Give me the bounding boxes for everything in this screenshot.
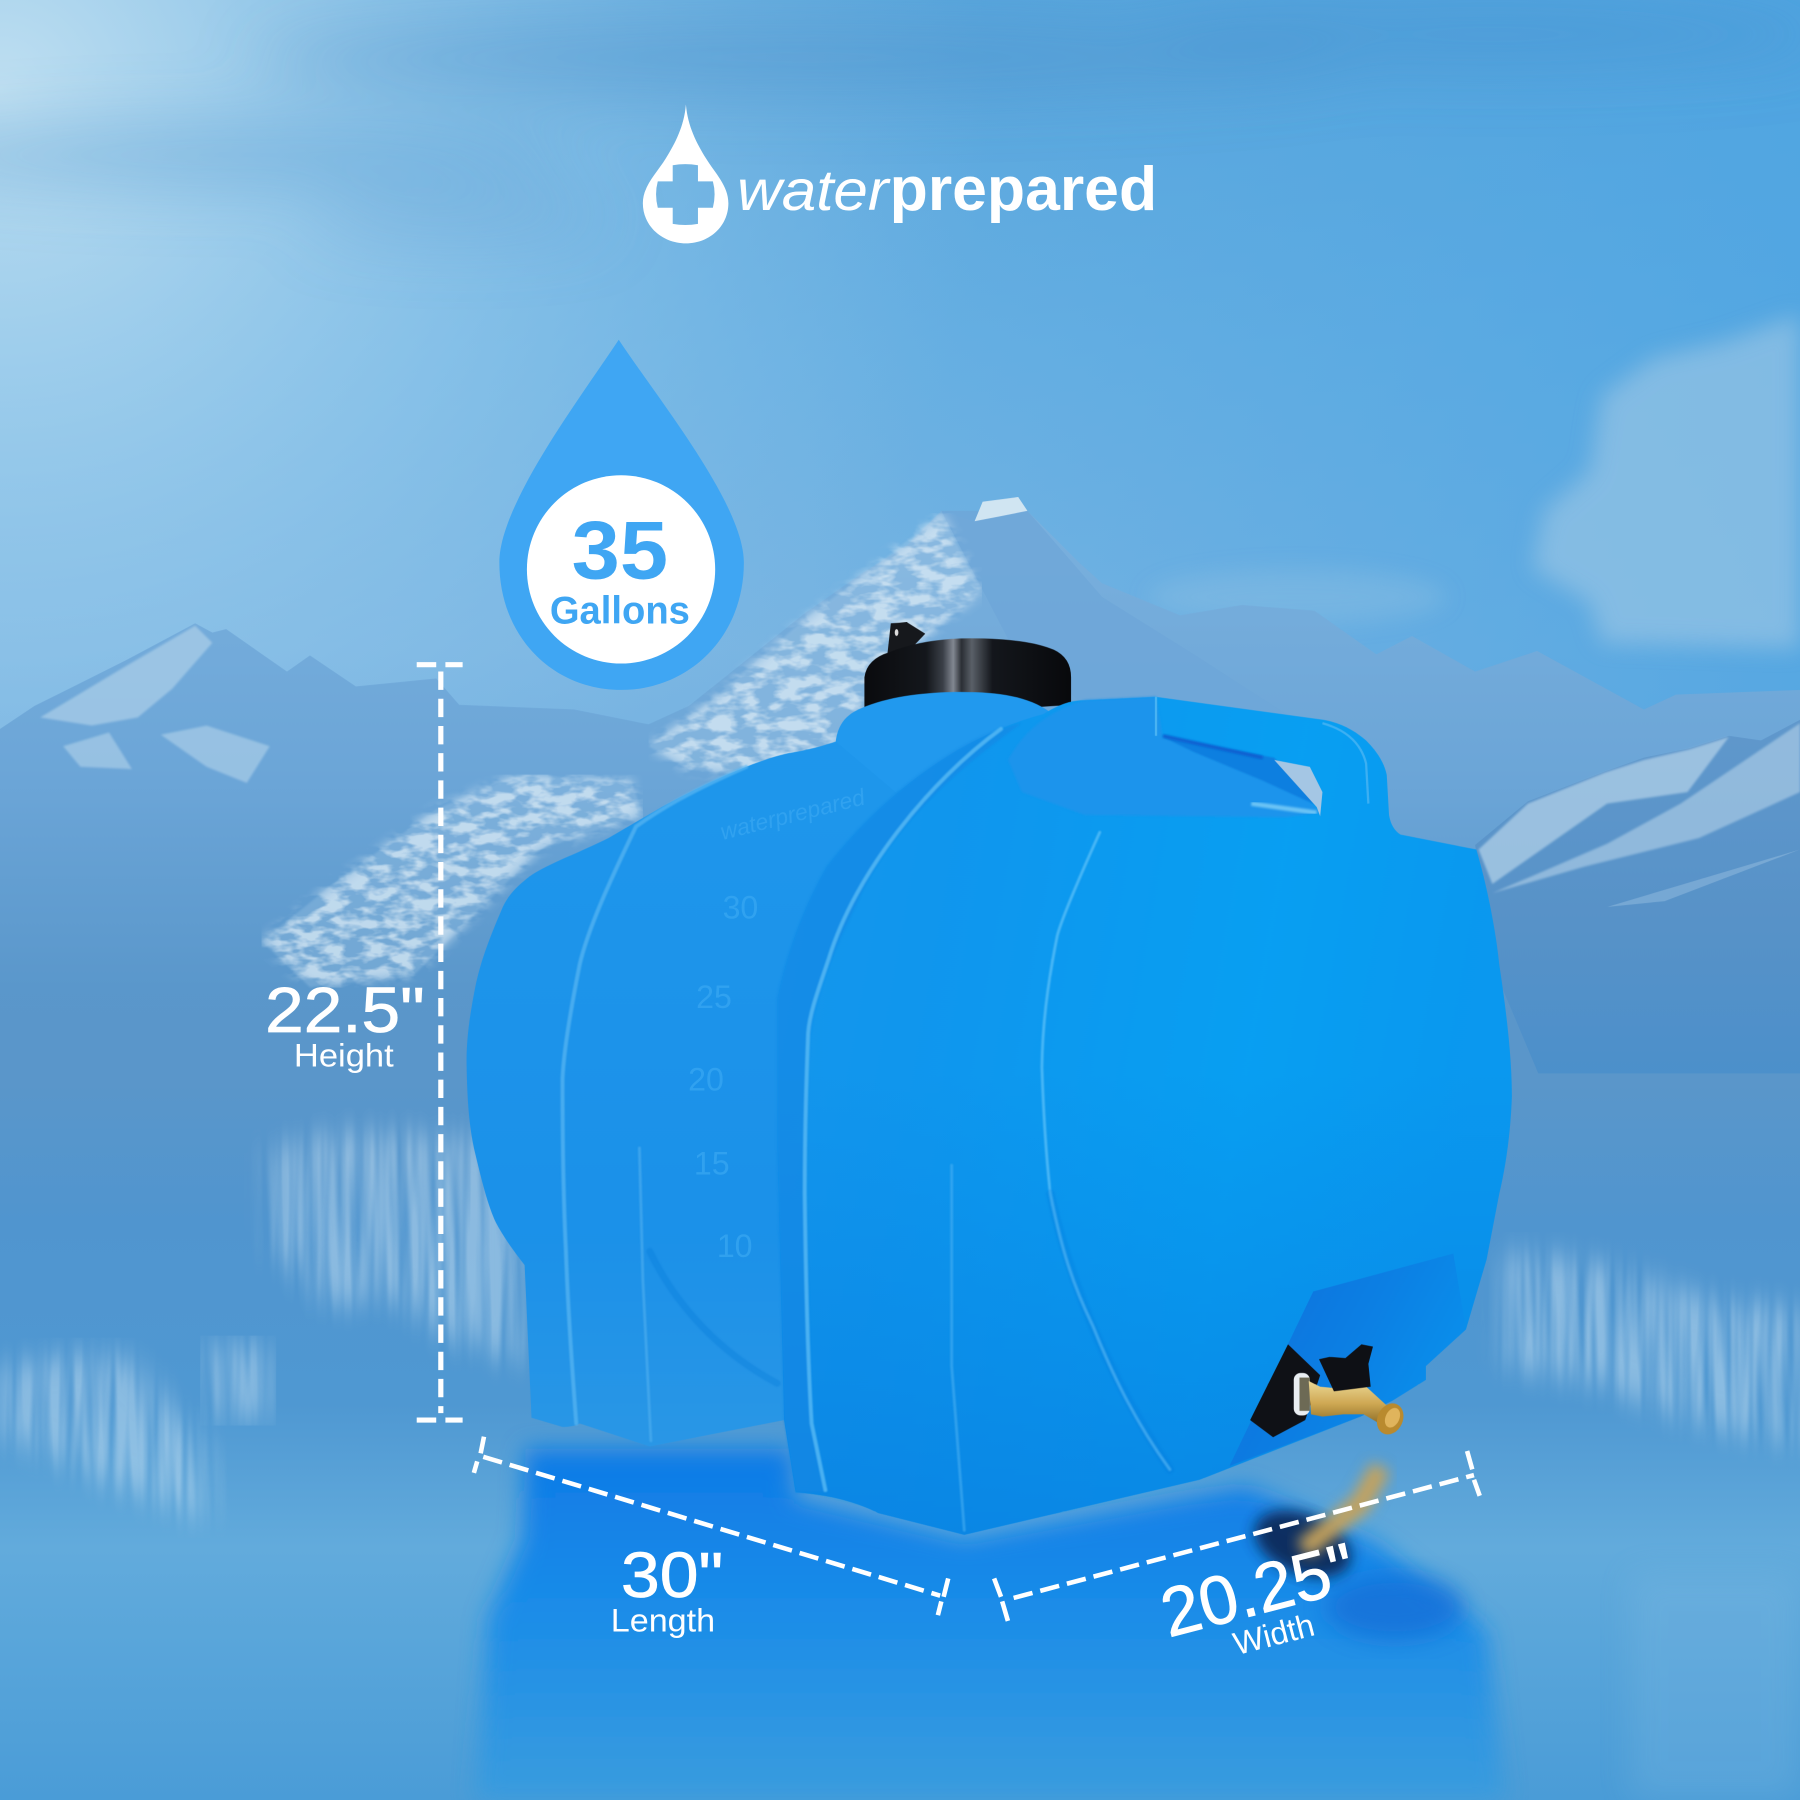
product: water tank [467, 622, 1512, 1535]
dimension: length [474, 1437, 948, 1638]
height measure line [417, 665, 463, 1420]
tank embossed markings: 20 [688, 1062, 724, 1098]
height label: Height [294, 1037, 394, 1073]
tank band shading [777, 723, 1022, 1492]
capacity unit: Gallons [550, 589, 690, 632]
logo wordmark: prepared [890, 155, 1157, 224]
height value: 22.5" [265, 974, 425, 1046]
background: high clouds [0, 5, 1800, 236]
tank reflection on water [476, 1449, 1504, 1800]
tank embossed markings [688, 783, 869, 1264]
tank embossed markings: 30 [723, 889, 758, 925]
capacity badge: 35 gallons [499, 340, 744, 690]
background: snow on mountains [40, 497, 1027, 987]
logo wordmark: water [737, 159, 892, 223]
background: right cloud [1148, 315, 1800, 649]
background: near right mountains [1475, 720, 1800, 1073]
tank cap [864, 622, 1071, 712]
dimension: width [994, 1451, 1480, 1662]
capacity number: 35 [572, 504, 668, 597]
width value: 20.25" [1153, 1528, 1363, 1652]
tank embossed markings: waterprepared [718, 783, 869, 845]
tank front section [777, 697, 1512, 1535]
tank embossed markings: 15 [694, 1145, 730, 1181]
width measure line [994, 1451, 1480, 1621]
length value: 30" [621, 1539, 723, 1611]
tank neck [836, 692, 1056, 792]
length label: Length [611, 1602, 715, 1638]
logo: waterprepared [643, 104, 1157, 243]
dimension: height [265, 665, 463, 1420]
width label: Width [1230, 1607, 1318, 1662]
spigot: brass valve [1294, 1344, 1408, 1439]
tank embossed markings: 10 [717, 1228, 753, 1264]
tank handle [1008, 697, 1368, 817]
length measure line [474, 1437, 948, 1615]
background: lake reflections [0, 1131, 1800, 1800]
tank ribs and highlights [562, 729, 1170, 1530]
icon: water drop with cross [643, 104, 728, 243]
background: far mountain range [0, 497, 1800, 1079]
tank rear section [467, 735, 1033, 1446]
spigot recess [1229, 1254, 1466, 1466]
icon: blue drop [499, 340, 744, 690]
spigot: black bracket [1250, 1344, 1320, 1437]
tank embossed markings: 25 [696, 979, 732, 1015]
